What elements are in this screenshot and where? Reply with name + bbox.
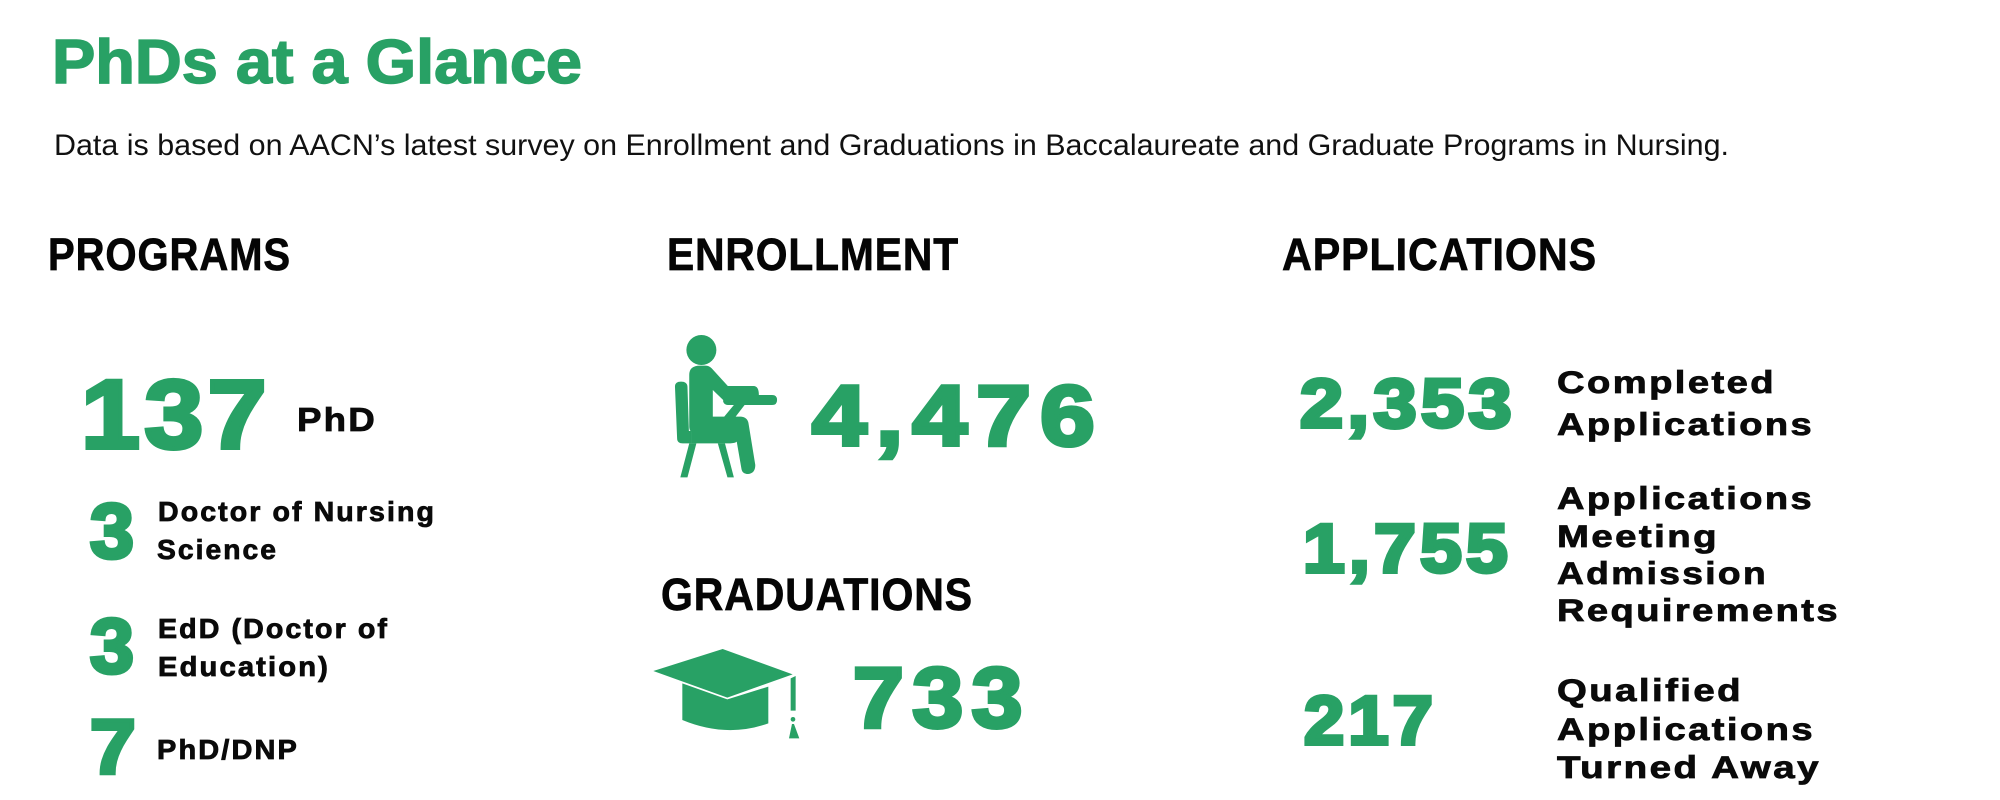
stat: 1,755 applications meeting admission requirements: Meeting <box>1557 518 1719 554</box>
stat: 3 Doctor of Nursing Science <box>90 488 436 574</box>
stat: 2,353 completed applications <box>1300 364 1814 442</box>
stat: 1,755 applications meeting admission requirements: Applications <box>1557 480 1814 516</box>
icon: seated student <box>675 335 777 477</box>
stat: 7 PhD/DNP: 7 <box>90 704 140 790</box>
heading: enrollment: ENROLLMENT <box>667 229 959 280</box>
stat: 217 qualified applications turned away: Applications <box>1557 711 1815 747</box>
stat: 2,353 completed applications: 2,353 <box>1300 365 1516 442</box>
stat: 3 Doctor of Nursing Science: 3 <box>90 488 138 574</box>
stat: 2,353 completed applications: Completed <box>1557 364 1776 400</box>
heading: graduations: GRADUATIONS <box>661 569 973 620</box>
stat: 1,755 applications meeting admission requirements: Admission <box>1557 555 1768 591</box>
stat: 1,755 applications meeting admission requirements <box>1303 480 1840 628</box>
stat: 2,353 completed applications: Applications <box>1557 406 1814 442</box>
stat: 733: 733 <box>853 651 1031 746</box>
panel: graduations <box>653 569 1031 746</box>
panel: applications <box>1282 229 1840 785</box>
stat: 137 PhD <box>81 360 377 469</box>
stat: 3 Doctor of Nursing Science: Doctor of Nursing <box>158 496 436 527</box>
stat: 3 EdD: EdD (Doctor of <box>158 613 389 644</box>
stat: 217 qualified applications turned away <box>1304 672 1821 785</box>
stat: 217 qualified applications turned away: Qualified <box>1557 672 1743 708</box>
stat: 1,755 applications meeting admission requirements: Requirements <box>1557 592 1840 628</box>
stat: 3 EdD <box>90 604 389 690</box>
stat: 3 EdD: Education) <box>158 651 330 682</box>
panel: programs <box>48 229 436 790</box>
stat: 217 qualified applications turned away: Turned Away <box>1557 749 1821 785</box>
stat: 3 EdD: 3 <box>90 604 138 690</box>
stat: 7 PhD/DNP <box>90 704 299 790</box>
stat: 3 Doctor of Nursing Science: Science <box>157 534 278 565</box>
title: PhDs at a Glance <box>52 28 582 97</box>
panel: enrollment <box>667 229 1104 477</box>
stat: 1,755 applications meeting admission requirements: 1,755 <box>1303 510 1512 587</box>
stat: 137 PhD: PhD <box>297 402 377 439</box>
stat: 137 PhD: 137 <box>81 360 271 469</box>
heading: programs: PROGRAMS <box>48 229 291 280</box>
stat: 217 qualified applications turned away: 217 <box>1304 682 1437 759</box>
stat: 4,476: 4,476 <box>812 369 1104 464</box>
icon: graduation cap <box>653 649 799 738</box>
stat: 7 PhD/DNP: PhD/DNP <box>157 734 299 765</box>
subtitle text: Data is based on AACN’s latest survey on Enrollment and Graduations in Baccalaureate and Graduate Programs in Nursing. <box>54 129 1729 162</box>
heading: applications: APPLICATIONS <box>1282 229 1597 280</box>
